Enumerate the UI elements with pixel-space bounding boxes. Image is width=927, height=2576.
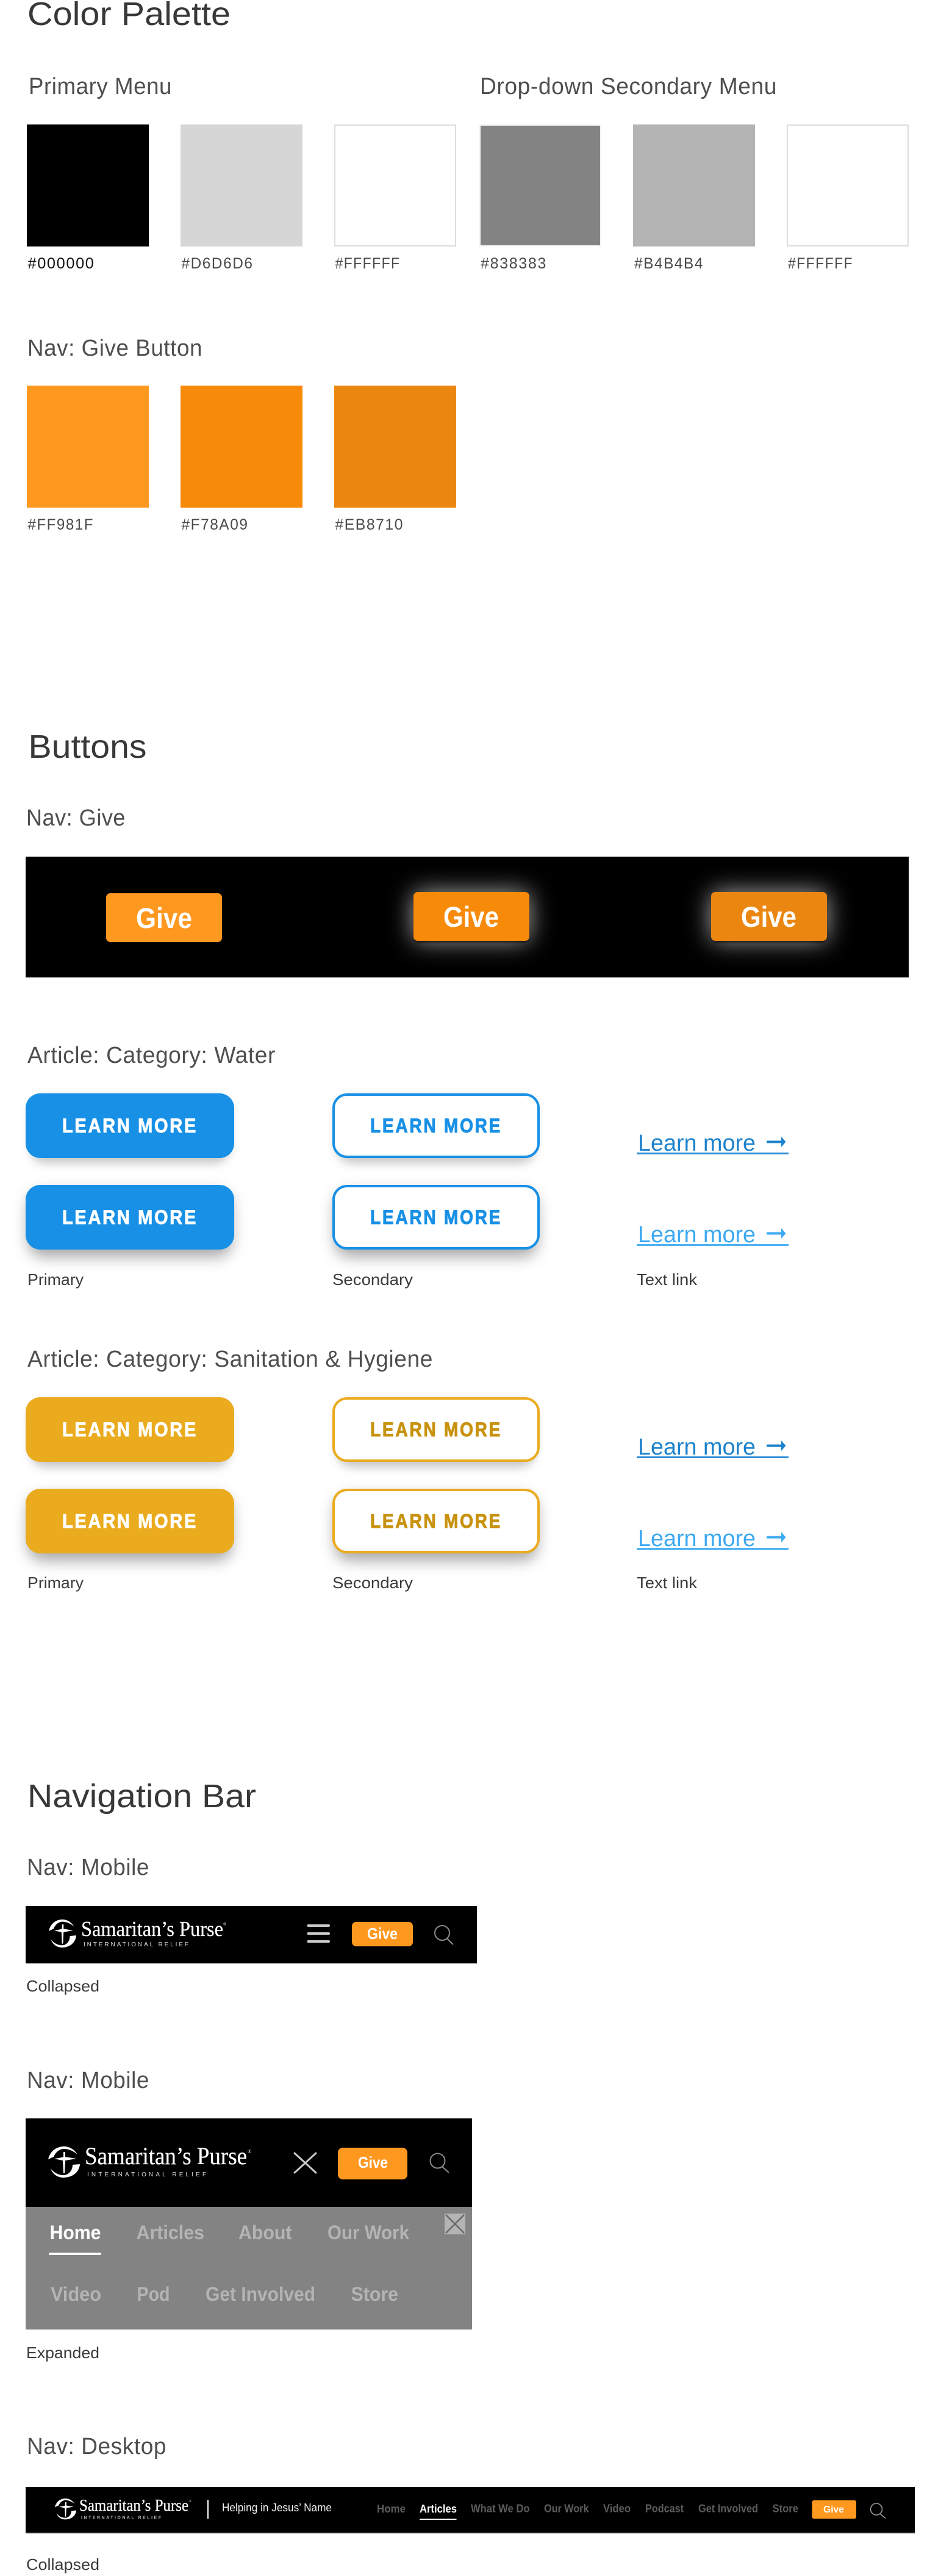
- swatch: EB8710: [334, 386, 456, 533]
- link: water learn more: Learn more: [638, 1131, 756, 1156]
- nav item: Video: Video: [603, 2503, 631, 2515]
- nav item: Video: Video: [51, 2283, 101, 2305]
- heading: Drop-down Secondary Menu: Drop-down Secondary Menu: [480, 74, 777, 99]
- button: water secondary: [334, 1095, 539, 1163]
- logo: tagline: INTERNATIONAL RELIEF: [84, 1941, 188, 1948]
- button: water primary hover: LEARN MORE: [62, 1206, 198, 1228]
- nav item: Get Involved: Get Involved: [698, 2503, 758, 2515]
- button: sanitation secondary: LEARN MORE: [370, 1419, 502, 1441]
- swatch: D6D6D6: #D6D6D6: [182, 255, 254, 272]
- button: give default: [106, 893, 222, 942]
- swatch: FF981F: [27, 386, 149, 533]
- nav item: Store: Store: [772, 2503, 798, 2515]
- nav item: Podcast: Podcast: [645, 2503, 684, 2515]
- nav item: Home: [49, 2222, 101, 2255]
- button: give: Give: [367, 1924, 398, 1943]
- nav item: About: About: [238, 2222, 292, 2243]
- button: water primary: LEARN MORE: [62, 1115, 198, 1137]
- caption: sanitation primary: Primary: [27, 1574, 84, 1592]
- title: Navigation Bar: Navigation Bar: [27, 1778, 256, 1815]
- logo: registered mark: ®: [189, 2500, 191, 2503]
- button: give: Give: [823, 2505, 844, 2515]
- button: water secondary: LEARN MORE: [370, 1115, 502, 1137]
- swatch: 838383: [480, 125, 601, 272]
- panel: desktop nav: [26, 2487, 915, 2534]
- icon: search: [435, 1926, 453, 1945]
- logo: registered mark: ®: [248, 2149, 251, 2154]
- button: water secondary hover: LEARN MORE: [370, 1206, 502, 1228]
- button: water primary: [26, 1093, 234, 1163]
- heading: Nav Desktop: Nav: Desktop: [27, 2434, 166, 2459]
- icon: dropdown close box: [445, 2214, 465, 2234]
- logo: tagline: INTERNATIONAL RELIEF: [81, 2516, 162, 2520]
- swatch: white secondary: [787, 125, 908, 272]
- icon: hamburger menu: [307, 1924, 330, 1943]
- swatch: white: #FFFFFF: [335, 255, 400, 272]
- tagline divider: [207, 2500, 209, 2519]
- logo: emblem: [48, 2146, 80, 2178]
- swatch: white: [335, 125, 456, 272]
- heading: Article Category Water: Article: Category: Water: [27, 1043, 276, 1068]
- caption: collapsed mobile: Collapsed: [26, 1977, 99, 1995]
- link: water learn more hover: Learn more: [638, 1222, 756, 1248]
- icon: search: [871, 2503, 886, 2519]
- button: give hover: Give: [443, 901, 499, 933]
- caption: sanitation text link: Text link: [637, 1574, 698, 1592]
- swatch: 838383: #838383: [481, 255, 547, 272]
- nav item: What We Do: What We Do: [471, 2503, 529, 2515]
- title: Buttons: Buttons: [28, 729, 146, 765]
- button: sanitation primary hover: [26, 1489, 234, 1561]
- caption: expanded mobile: Expanded: [26, 2344, 99, 2362]
- nav item: Pod: Pod: [137, 2283, 170, 2305]
- button: water primary hover: [26, 1185, 234, 1257]
- button: give: [352, 1922, 413, 1946]
- button: give: Give: [358, 2153, 388, 2171]
- nav item: Articles: Articles: [137, 2222, 204, 2243]
- heading: Primary Menu: Primary Menu: [29, 74, 172, 99]
- caption: collapsed desktop: Collapsed: [26, 2555, 99, 2574]
- swatch: D6D6D6: [181, 124, 302, 272]
- logo: wordmark: Samaritan’s Purse: [85, 2142, 247, 2170]
- swatch: F78A09: [181, 386, 302, 533]
- button: sanitation primary: LEARN MORE: [62, 1419, 198, 1441]
- button: give: [812, 2500, 856, 2519]
- logo: registered mark: ®: [223, 1922, 227, 1927]
- panel: mobile nav collapsed: [26, 1906, 477, 1963]
- nav item: Articles active: Articles: [420, 2503, 457, 2515]
- button: give: [338, 2148, 407, 2179]
- caption: water secondary: Secondary: [332, 1270, 413, 1289]
- caption: water text link: Text link: [637, 1270, 698, 1289]
- button: water secondary hover: [334, 1186, 539, 1257]
- icon: search: [431, 2154, 449, 2173]
- heading: Nav Mobile collapsed: Nav: Mobile: [27, 1855, 149, 1880]
- swatch: FF981F: #FF981F: [28, 516, 94, 533]
- nav item: Store: Store: [351, 2283, 398, 2305]
- swatch: EB8710: #EB8710: [335, 516, 404, 533]
- heading: Nav Give Button: Nav: Give Button: [27, 336, 202, 361]
- button: sanitation secondary hover: [334, 1490, 539, 1561]
- tagline text: Helping in Jesus’ Name: [222, 2502, 332, 2514]
- nav item: Our Work: Our Work: [327, 2222, 409, 2243]
- panel: nav give button states: [26, 857, 909, 977]
- caption: sanitation secondary: Secondary: [332, 1574, 413, 1592]
- caption: water primary: Primary: [27, 1270, 84, 1289]
- swatch: B4B4B4: [633, 124, 755, 272]
- nav item: Our Work: Our Work: [544, 2503, 589, 2515]
- button: sanitation secondary hover: LEARN MORE: [370, 1510, 502, 1532]
- swatch: F78A09: #F78A09: [182, 516, 249, 533]
- nav item: Get Involved: Get Involved: [206, 2283, 315, 2305]
- button: sanitation primary hover: LEARN MORE: [62, 1510, 198, 1532]
- swatch: white secondary: #FFFFFF: [788, 255, 853, 272]
- icon: close: [295, 2153, 316, 2173]
- nav item: Home: Home: [377, 2503, 406, 2515]
- button: give default: Give: [136, 902, 192, 934]
- button: give hover: [413, 892, 529, 942]
- link: sanitation learn more hover: Learn more: [638, 1526, 756, 1552]
- nav item: Articles active: [420, 2503, 457, 2520]
- logo: emblem: [49, 1919, 76, 1948]
- heading: Nav Give: Nav: Give: [26, 805, 126, 831]
- button: sanitation primary: [26, 1397, 234, 1467]
- link: sanitation learn more: Learn more: [638, 1434, 756, 1460]
- button: give active: [711, 892, 827, 942]
- swatch: black: [27, 124, 149, 272]
- logo: emblem: [55, 2499, 76, 2519]
- heading: Article Category Sanitation and Hygiene: Article: Category: Sanitation & Hygiene: [27, 1347, 433, 1372]
- button: sanitation secondary: [334, 1398, 539, 1467]
- panel: mobile nav expanded: [26, 2118, 472, 2330]
- logo: tagline: INTERNATIONAL RELIEF: [87, 2171, 206, 2178]
- swatch: B4B4B4: #B4B4B4: [634, 255, 704, 272]
- logo: wordmark: Samaritan’s Purse: [81, 1917, 223, 1941]
- swatch: black: #000000: [28, 255, 95, 272]
- button: give active: Give: [741, 901, 796, 933]
- nav item: Home: Home: [50, 2222, 101, 2243]
- logo: wordmark: Samaritan’s Purse: [79, 2496, 188, 2514]
- heading: Nav Mobile expanded: Nav: Mobile: [27, 2068, 149, 2093]
